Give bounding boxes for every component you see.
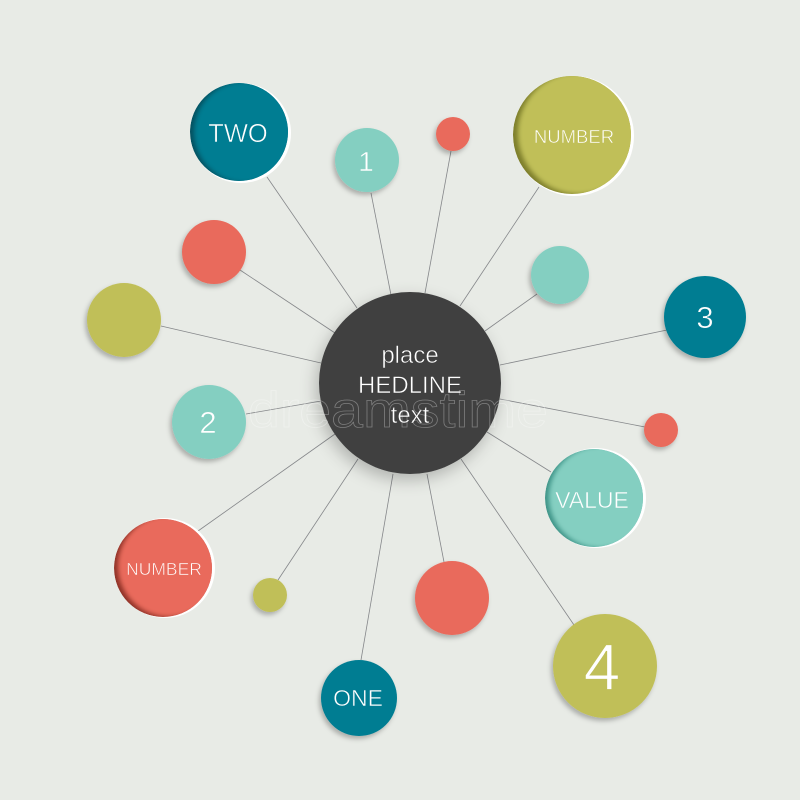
node: NUMBER olive [513,72,640,196]
center hub [319,292,501,474]
center hub: HEDLINE [358,372,462,399]
node: TWO: TWO [208,120,268,148]
node: 3 [664,276,746,358]
node: NUMBER red: NUMBER [126,559,202,579]
connector lines [161,151,667,660]
node: olive left [87,283,161,357]
node: NUMBER olive: NUMBER [534,126,614,147]
node: 2: 2 [199,405,217,440]
node: TWO [190,81,296,183]
node: VALUE [545,446,651,548]
node: ONE [321,660,397,736]
node: red bottom [415,561,489,635]
node: 4: 4 [584,630,620,704]
node: small red top [436,117,470,151]
node: small red right [644,413,678,447]
node: NUMBER red [114,515,220,618]
node: 4 [553,614,657,718]
node: 2 [172,385,246,459]
node: 3: 3 [696,300,714,335]
center hub: place [381,342,439,369]
node: red upper left [182,220,246,284]
node: ONE: ONE [333,685,383,711]
node: teal upper right [531,246,589,304]
node: 1: 1 [358,146,374,177]
watermark: dreamstime [248,382,548,438]
node: VALUE: VALUE [555,487,629,513]
node: small olive bottom [253,578,287,612]
center hub: text [391,402,430,429]
node: 1 [335,128,399,192]
